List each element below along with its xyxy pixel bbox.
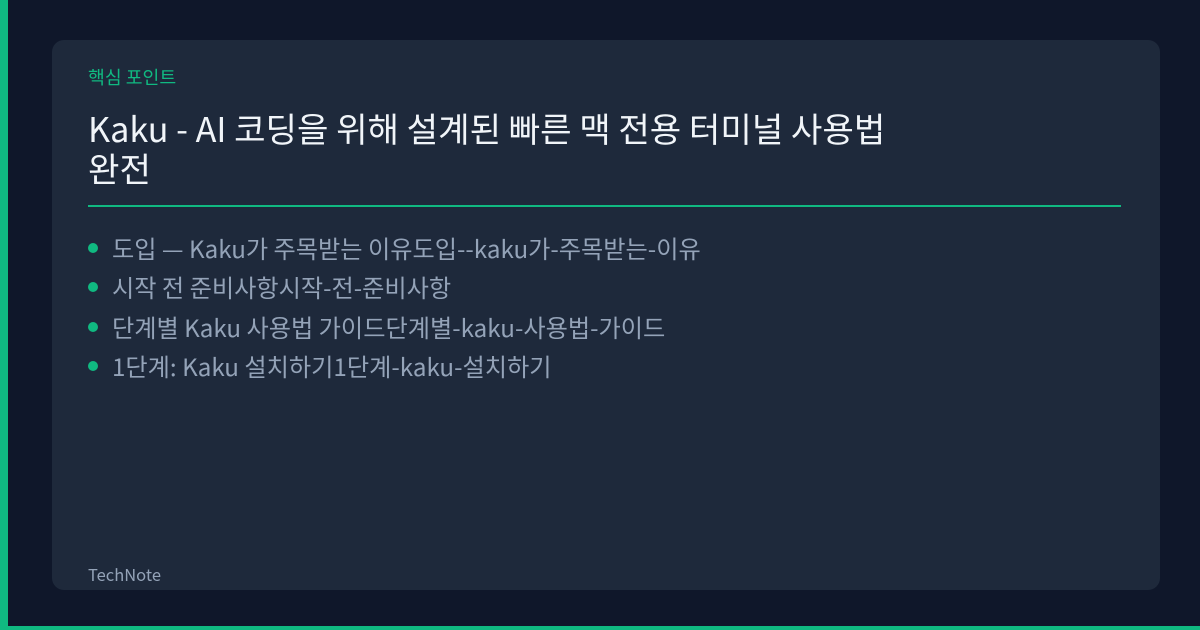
tag label: 핵심 포인트 <box>88 64 176 90</box>
title: Kaku - AI 코딩을 위해 설계된 빠른 맥 전용 터미널 사용법 완전 <box>88 102 885 192</box>
bullet 3: 단계별 Kaku 사용법 가이드단계별-kaku-사용법-가이드 <box>112 309 665 344</box>
bullet 2: 시작 전 준비사항시작-전-준비사항 <box>112 269 451 304</box>
bullet list <box>88 230 701 383</box>
bullet 4: 1단계: Kaku 설치하기1단계-kaku-설치하기 <box>112 348 552 383</box>
footer brand: TechNote <box>88 562 161 586</box>
bullet 1: 도입 — Kaku가 주목받는 이유도입--kaku가-주목받는-이유 <box>112 230 701 265</box>
